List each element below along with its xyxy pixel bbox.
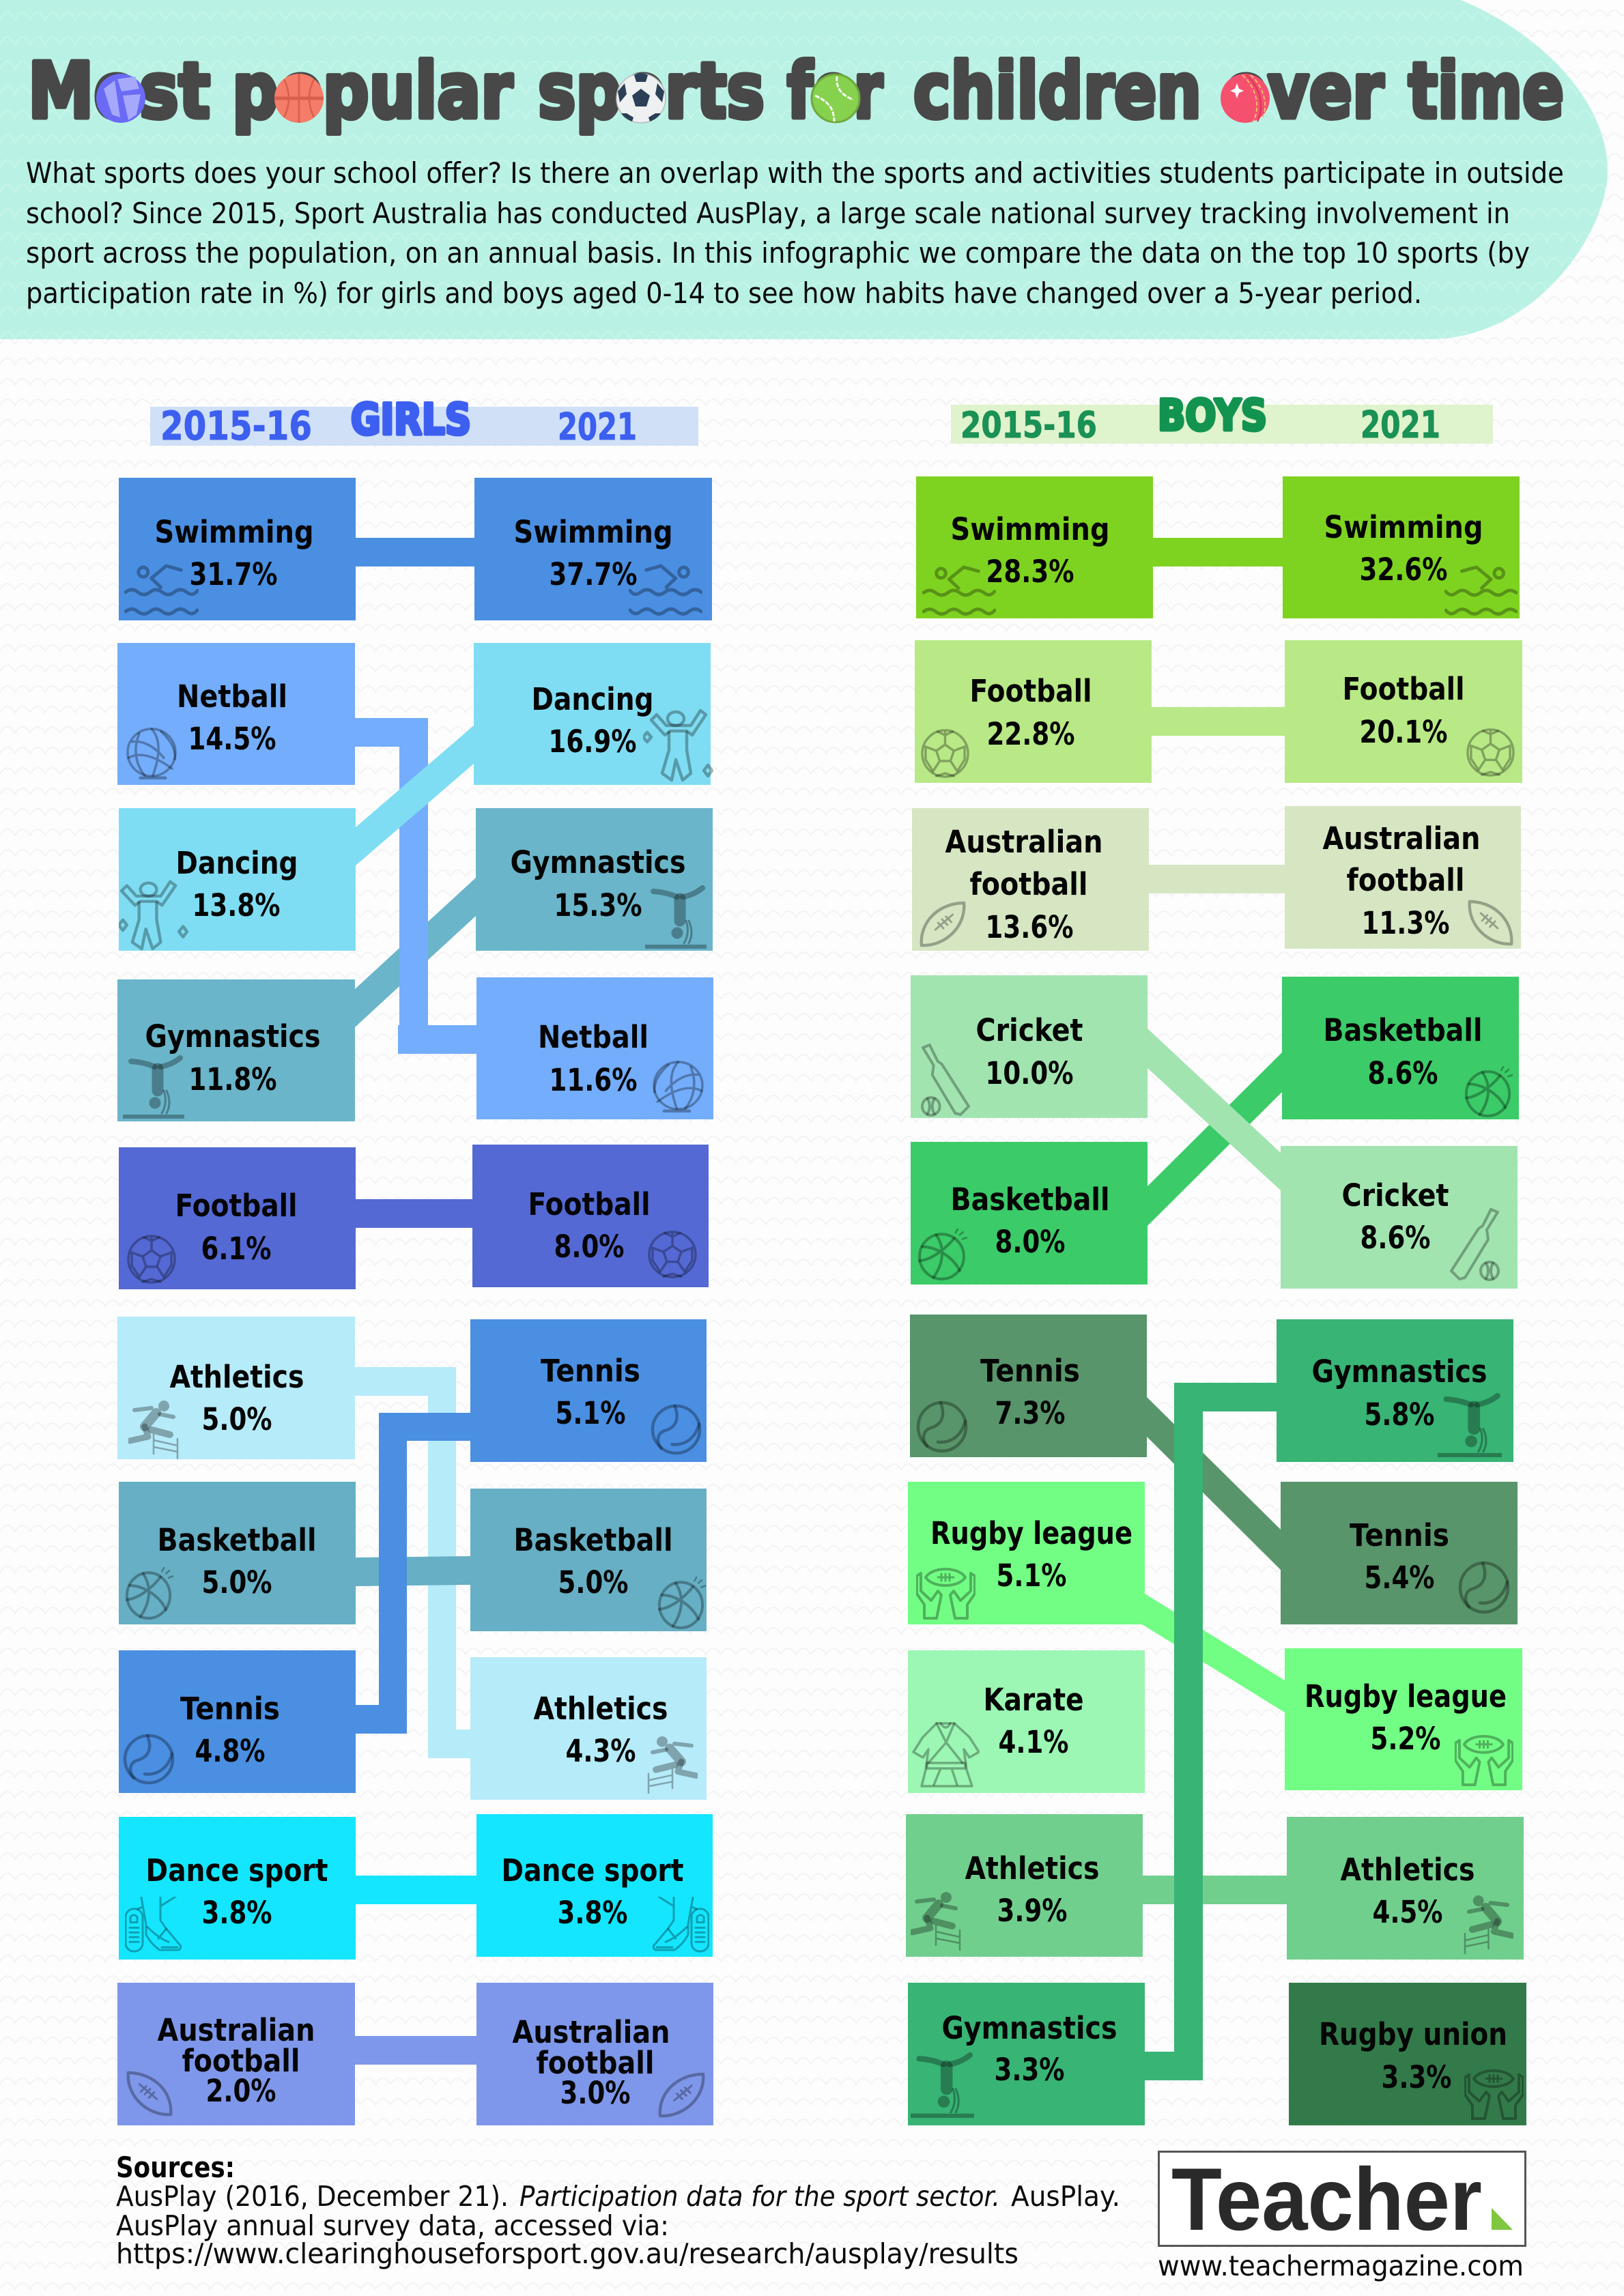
arrow: football — [1152, 707, 1285, 736]
box: australian football 2021: football — [1346, 862, 1465, 898]
arrow: australian football — [355, 2036, 477, 2065]
sources text — [116, 2151, 1120, 2270]
arrow: dance sport — [356, 1876, 477, 1904]
box: athletics 2015-16 — [117, 1317, 355, 1459]
box: netball 2015-16: Netball — [177, 678, 287, 715]
box: cricket 2021: 8.6% — [1360, 1220, 1431, 1256]
icon: basketball — [274, 74, 324, 123]
box: athletics 2021 — [470, 1657, 707, 1800]
box: football 2021: 8.0% — [554, 1229, 624, 1265]
sources text: https://www.clearinghouseforsport.gov.au/research/ausplay/results — [116, 2237, 1018, 2270]
box: gymnastics 2021: Gymnastics — [511, 844, 685, 880]
box: gymnastics 2015-16: 3.3% — [994, 2052, 1065, 2088]
box: athletics 2015-16: Athletics — [965, 1850, 1099, 1886]
heading: boys band: BOYS — [1158, 390, 1267, 440]
box: athletics 2021: Athletics — [1341, 1852, 1475, 1888]
box: dance sport 2015-16: Dance sport — [146, 1852, 328, 1889]
arrow: dancing — [356, 726, 474, 865]
box: cricket 2021 — [1281, 1146, 1518, 1289]
box: basketball 2015-16: Basketball — [950, 1181, 1110, 1218]
arrow: football — [356, 1199, 473, 1228]
box: tennis 2015-16: Tennis — [980, 1353, 1080, 1389]
box: basketball 2015-16 — [911, 1142, 1148, 1285]
sources text: AusPlay annual survey data, accessed via: — [116, 2209, 669, 2242]
box: athletics 2015-16: 3.9% — [997, 1893, 1068, 1929]
box: football 2015-16: Football — [175, 1188, 298, 1224]
intro text — [26, 156, 1564, 310]
box: swimming 2021 — [474, 478, 712, 620]
box: football 2015-16 — [915, 640, 1152, 783]
box: rugby league 2015-16: Rugby league — [930, 1515, 1132, 1551]
panel: girls chart — [117, 394, 713, 2125]
box: football 2015-16: Football — [969, 673, 1092, 709]
box: tennis 2015-16: Tennis — [180, 1691, 280, 1727]
box: netball 2021 — [476, 977, 713, 1119]
box: dancing 2021 — [474, 643, 712, 785]
arrow: athletics — [355, 1367, 470, 1758]
arrow: australian football — [1149, 865, 1285, 893]
box: swimming 2015-16 — [119, 478, 356, 620]
intro text: sport across the population, on an annual basis. In this infographic we compare the data on the top 10 sports (by — [26, 236, 1530, 270]
arrow: basketball — [356, 1556, 470, 1586]
box: gymnastics 2015-16 — [117, 979, 355, 1121]
arrow: cricket — [1148, 1029, 1281, 1190]
heading: boys band — [951, 390, 1493, 446]
box: cricket 2021: Cricket — [1342, 1177, 1449, 1214]
box: swimming 2015-16 — [916, 476, 1153, 618]
title: Most — [28, 47, 210, 136]
icon: soccer ball — [616, 73, 666, 123]
box: dance sport 2015-16 — [119, 1817, 356, 1960]
box: tennis 2021: 5.4% — [1364, 1560, 1435, 1596]
box: australian football 2015-16: football — [969, 866, 1088, 902]
box: gymnastics 2021: 15.3% — [554, 887, 642, 923]
box: tennis 2015-16 — [910, 1315, 1147, 1457]
box: tennis 2015-16: 7.3% — [995, 1395, 1065, 1431]
box: australian football 2021: Australian — [1323, 820, 1480, 857]
box: football 2015-16: 6.1% — [201, 1231, 272, 1267]
sources text: AusPlay (2016, December 21). — [116, 2180, 509, 2213]
box: karate 2015-16 — [908, 1650, 1145, 1793]
box: rugby league 2021 — [1285, 1648, 1522, 1790]
logo: Teacher: Teacher — [1171, 2149, 1482, 2249]
box: gymnastics 2021 — [1277, 1319, 1513, 1462]
box: gymnastics 2021 — [476, 808, 713, 951]
box: gymnastics 2021: Gymnastics — [1312, 1353, 1487, 1390]
title: popular — [232, 47, 513, 136]
box: gymnastics 2015-16: Gymnastics — [145, 1018, 321, 1054]
box: netball 2021: 11.6% — [549, 1062, 638, 1098]
icon: volleyball — [96, 74, 145, 123]
box: netball 2015-16: 14.5% — [188, 721, 276, 757]
box: swimming 2015-16: Swimming — [950, 511, 1110, 547]
box: tennis 2021: 5.1% — [556, 1395, 625, 1431]
box: football 2021 — [472, 1145, 709, 1287]
box: basketball 2021: Basketball — [513, 1522, 673, 1558]
box: cricket 2015-16: 10.0% — [986, 1055, 1073, 1091]
box: basketball 2021: 5.0% — [558, 1564, 628, 1601]
box: basketball 2021 — [1282, 977, 1519, 1119]
box: rugby union 2021 — [1289, 1983, 1526, 2125]
arrow: gymnastics — [355, 878, 476, 1027]
arrow: tennis — [356, 1413, 470, 1734]
box: australian football 2021: 11.3% — [1361, 905, 1450, 941]
heading: boys band: 2015-16 — [960, 405, 1097, 446]
arrow: rugby league — [1142, 1594, 1285, 1712]
box: rugby league 2015-16 — [908, 1482, 1145, 1624]
box: karate 2015-16: 4.1% — [998, 1724, 1069, 1760]
box: football 2015-16: 22.8% — [987, 716, 1074, 752]
title: sports — [538, 47, 765, 136]
box: tennis 2015-16 — [119, 1650, 356, 1793]
box: basketball 2015-16 — [119, 1482, 356, 1624]
box: football 2015-16 — [119, 1147, 356, 1289]
sources text: Participation data for the sport sector. — [519, 2180, 1000, 2213]
box: rugby union 2021: Rugby union — [1319, 2016, 1507, 2052]
heading: girls band — [150, 394, 698, 449]
title: time — [1408, 47, 1564, 136]
box: basketball 2015-16: 8.0% — [995, 1224, 1065, 1260]
box: swimming 2021 — [1283, 476, 1520, 618]
box: dance sport 2015-16: 3.8% — [202, 1895, 272, 1931]
intro text: school? Since 2015, Sport Australia has conducted AusPlay, a large scale national survey tracking involvement in — [26, 197, 1510, 230]
box: swimming 2021: 37.7% — [549, 556, 638, 592]
arrow: basketball — [1148, 1052, 1282, 1226]
title: children — [913, 47, 1201, 136]
box: athletics 2021: 4.5% — [1372, 1894, 1443, 1930]
box: athletics 2021 — [1287, 1817, 1524, 1960]
box: athletics 2015-16: 5.0% — [202, 1401, 272, 1437]
box: australian football 2015-16: Australian — [157, 2012, 315, 2048]
box: australian football 2021: 3.0% — [560, 2075, 631, 2111]
heading: boys band: 2021 — [1361, 403, 1440, 446]
box: athletics 2015-16: Athletics — [169, 1359, 304, 1395]
box: tennis 2021: Tennis — [1350, 1517, 1449, 1553]
box: australian football 2015-16: Australian — [945, 824, 1103, 860]
arrow: swimming — [1153, 538, 1283, 566]
box: australian football 2015-16: football — [182, 2043, 300, 2079]
box: gymnastics 2015-16 — [908, 1983, 1145, 2125]
box: swimming 2021: 32.6% — [1360, 551, 1447, 588]
box: australian football 2021 — [1285, 806, 1521, 949]
box: football 2021: Football — [528, 1186, 650, 1222]
box: australian football 2021 — [476, 1983, 713, 2125]
arrow: tennis — [1147, 1397, 1281, 1570]
website url: www.teachermagazine.com — [1158, 2250, 1524, 2282]
box: swimming 2015-16: 28.3% — [986, 554, 1074, 590]
box: australian football 2015-16 — [912, 808, 1149, 951]
box: karate 2015-16: Karate — [983, 1682, 1084, 1718]
box: gymnastics 2015-16: Gymnastics — [942, 2010, 1117, 2046]
title: over — [1224, 47, 1384, 136]
box: rugby league 2015-16: 5.1% — [997, 1558, 1066, 1594]
box: dance sport 2021: 3.8% — [557, 1895, 628, 1931]
box: basketball 2021 — [470, 1489, 707, 1631]
icon: cricket ball — [1221, 74, 1270, 123]
box: dance sport 2021 — [476, 1814, 713, 1957]
box: dance sport 2021: Dance sport — [501, 1852, 684, 1889]
box: gymnastics 2021: 5.8% — [1364, 1396, 1435, 1433]
box: australian football 2021: Australian — [512, 2014, 670, 2050]
panel: boys chart — [906, 390, 1526, 2125]
box: basketball 2015-16: 5.0% — [202, 1564, 272, 1601]
box: swimming 2021: Swimming — [1324, 509, 1483, 545]
box: australian football 2015-16: 13.6% — [986, 909, 1073, 945]
box: tennis 2021 — [470, 1319, 707, 1462]
box: netball 2021: Netball — [538, 1019, 649, 1055]
box: australian football 2015-16: 2.0% — [206, 2073, 276, 2109]
box: dancing 2021: 16.9% — [549, 723, 636, 760]
box: basketball 2021: Basketball — [1323, 1012, 1483, 1048]
arrow: athletics — [1143, 1876, 1287, 1904]
box: rugby union 2021: 3.3% — [1382, 2059, 1451, 2095]
box: dancing 2015-16: Dancing — [176, 845, 298, 881]
box: tennis 2015-16: 4.8% — [195, 1733, 265, 1769]
box: football 2021: 20.1% — [1360, 714, 1447, 750]
box: cricket 2015-16 — [911, 975, 1148, 1118]
sources text: Sources: — [116, 2151, 235, 2184]
heading: girls band: 2015-16 — [160, 403, 312, 449]
box: swimming 2015-16: Swimming — [154, 514, 314, 550]
box: athletics 2021: Athletics — [534, 1691, 668, 1727]
sources text: AusPlay. — [1011, 2180, 1120, 2213]
box: australian football 2015-16 — [117, 1983, 355, 2125]
box: tennis 2021 — [1281, 1482, 1518, 1624]
box: football 2021: Football — [1342, 671, 1465, 707]
box: dancing 2015-16 — [119, 808, 356, 951]
box: rugby league 2021: Rugby league — [1305, 1678, 1507, 1714]
header panel — [0, 0, 1608, 339]
box: netball 2015-16 — [117, 643, 355, 785]
box: football 2021 — [1285, 640, 1522, 783]
box: cricket 2015-16: Cricket — [976, 1012, 1083, 1048]
box: athletics 2015-16 — [906, 1814, 1143, 1957]
arrow: netball — [355, 718, 476, 1054]
heading: girls band: 2021 — [558, 405, 637, 448]
title: for — [787, 47, 883, 136]
box: athletics 2021: 4.3% — [565, 1733, 636, 1769]
arrow: swimming — [356, 538, 475, 566]
icon: tennis ball — [812, 74, 859, 122]
box: dancing 2015-16: 13.8% — [193, 887, 280, 923]
box: tennis 2021: Tennis — [541, 1353, 640, 1389]
box: rugby league 2021: 5.2% — [1371, 1721, 1440, 1757]
arrow: gymnastics — [1145, 1383, 1277, 2080]
box: gymnastics 2015-16: 11.8% — [188, 1061, 277, 1097]
box: dancing 2021: Dancing — [531, 681, 654, 717]
box: basketball 2015-16: Basketball — [157, 1522, 317, 1558]
box: australian football 2021: football — [537, 2045, 654, 2081]
box: swimming 2021: Swimming — [513, 514, 673, 550]
intro text: participation rate in %) for girls and boys aged 0-14 to see how habits have changed over a 5-year period. — [26, 276, 1422, 310]
box: basketball 2021: 8.6% — [1368, 1055, 1438, 1091]
heading: girls band: GIRLS — [351, 394, 471, 444]
box: swimming 2015-16: 31.7% — [190, 556, 277, 592]
title — [28, 47, 1564, 136]
